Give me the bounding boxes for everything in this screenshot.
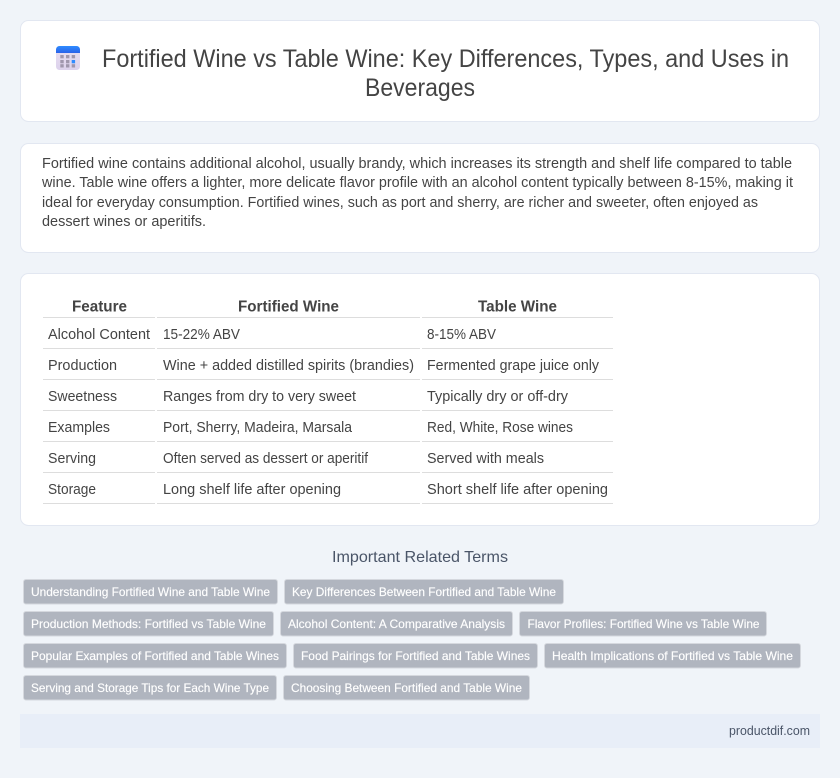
table row: examples: Red, White, Rose wines [427, 420, 573, 436]
panel: title card [20, 20, 820, 122]
table row: storage: Long shelf life after opening [163, 482, 341, 498]
tag [294, 644, 538, 668]
tag: Key Differences Between Fortified and Table Wine [292, 585, 556, 599]
tag group: related terms [24, 580, 800, 700]
table row: sweetness [48, 389, 569, 405]
tag: Health Implications of Fortified vs Table Wine [552, 649, 793, 663]
table row: serving: Often served as dessert or aperitif [163, 451, 369, 467]
table row: storage: Short shelf life after opening [427, 482, 608, 498]
table row: serving [48, 451, 544, 467]
table row: examples: Examples [48, 420, 110, 436]
intro text: wine. Table wine offers a lighter, more delicate flavor profile with an alcohol content typically between 8-15%, making it [41, 175, 793, 191]
table row: sweetness: Ranges from dry to very sweet [163, 389, 356, 405]
heading: important related terms: Important Related Terms [332, 549, 508, 566]
table header [72, 298, 557, 316]
table row: production: Wine + added distilled spirits (brandies) [163, 358, 414, 374]
table row: storage: Storage [48, 482, 96, 498]
tag: Alcohol Content: A Comparative Analysis [288, 617, 505, 631]
table row: alcohol content: Alcohol Content [48, 327, 150, 343]
table header: Feature [72, 298, 127, 316]
table row: serving: Serving [48, 451, 96, 467]
intro text: dessert wines or aperitifs. [42, 214, 206, 230]
table row: storage [48, 482, 608, 498]
tag [284, 676, 530, 700]
table row: alcohol content: 15-22% ABV [163, 327, 240, 343]
tag [24, 644, 286, 668]
table row: sweetness: Typically dry or off-dry [427, 389, 569, 405]
footer source text: productdif.com [729, 724, 810, 738]
tag [520, 612, 766, 636]
tag: Production Methods: Fortified vs Table Wine [31, 617, 266, 631]
tag [24, 676, 276, 700]
title: Fortified Wine vs Table Wine: Key Differences, Types, and Uses in [102, 45, 789, 73]
tag: Choosing Between Fortified and Table Wine [291, 681, 522, 695]
table row: serving: Served with meals [427, 451, 544, 467]
table row: production: Production [48, 358, 117, 374]
icon: calendar [56, 46, 80, 70]
table header: Table Wine [478, 298, 557, 316]
tag [280, 612, 512, 636]
intro text: ideal for everyday consumption. Fortified wines, such as port and sherry, are richer and sweeter, often enjoyed as [42, 195, 758, 211]
tag: Serving and Storage Tips for Each Wine Type [31, 681, 269, 695]
panel: comparison table [20, 274, 820, 526]
tag [24, 612, 274, 636]
panel: intro paragraph [20, 144, 820, 252]
table row: production [48, 358, 600, 374]
tag [24, 580, 278, 604]
title: Beverages [365, 74, 475, 102]
table header: Fortified Wine [238, 298, 339, 316]
tag: Popular Examples of Fortified and Table Wines [31, 649, 279, 663]
tag: Food Pairings for Fortified and Table Wines [301, 649, 530, 663]
tag [284, 580, 564, 604]
tag: Understanding Fortified Wine and Table Wine [31, 585, 270, 599]
table row: alcohol content [48, 327, 496, 343]
title [102, 45, 789, 102]
table row: examples: Port, Sherry, Madeira, Marsala [163, 420, 353, 436]
table row: examples [48, 420, 573, 436]
table row: alcohol content: 8-15% ABV [427, 327, 496, 343]
table row: sweetness: Sweetness [48, 389, 117, 405]
tag: Flavor Profiles: Fortified Wine vs Table Wine [528, 617, 760, 631]
table row: production: Fermented grape juice only [427, 358, 600, 374]
intro text: Fortified wine contains additional alcohol, usually brandy, which increases its strength and shelf life compared to table [42, 156, 792, 172]
tag [544, 644, 800, 668]
footer bar [20, 714, 820, 748]
intro text [41, 156, 793, 230]
